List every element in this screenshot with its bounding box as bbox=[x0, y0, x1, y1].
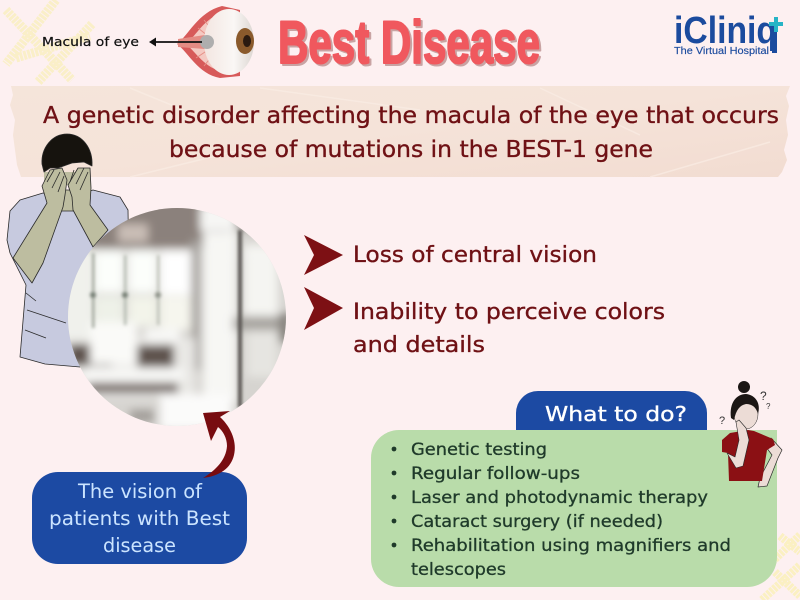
symptom: inability to perceive colors and details: Inability to perceive colors bbox=[353, 299, 665, 325]
panel: what to do list bbox=[371, 430, 777, 587]
title: Best Disease bbox=[280, 11, 542, 78]
symptom: inability to perceive colors and details: and details bbox=[353, 332, 485, 358]
symptom: loss of central vision: Loss of central vision bbox=[353, 242, 597, 268]
bullet icon: second chevron bbox=[304, 287, 343, 330]
illustration: thinking woman: ? bbox=[766, 402, 771, 411]
panel: what to do list: Genetic testing bbox=[411, 440, 547, 459]
panel: vision caption: patients with Best bbox=[49, 507, 230, 530]
label: macula of eye: Macula of eye bbox=[42, 34, 139, 49]
title bbox=[278, 9, 542, 78]
panel: what to do list: Cataract surgery (if needed) bbox=[411, 512, 663, 531]
panel: what to do list: telescopes bbox=[411, 560, 506, 579]
illustration: thinking woman: ? bbox=[760, 389, 767, 403]
arrow: macula pointer bbox=[149, 38, 202, 46]
illustration: thinking woman: ? bbox=[719, 415, 725, 427]
panel: what to do list: Laser and photodynamic therapy bbox=[411, 488, 708, 507]
symptom: inability to perceive colors and details bbox=[353, 299, 665, 358]
panel: vision caption: The vision of bbox=[77, 480, 203, 503]
illustration: man covering his eyes bbox=[7, 134, 130, 367]
arrow: caption to vision circle bbox=[203, 411, 235, 478]
panel: what to do list: Rehabilitation using magnifiers and bbox=[411, 536, 731, 555]
logo: iCliniq: The Virtual Hospital bbox=[674, 46, 769, 57]
illustration: thinking woman bbox=[719, 381, 782, 487]
definition text: because of mutations in the BEST-1 gene bbox=[169, 137, 653, 163]
decoration: yellow crosshatch top left bbox=[6, 0, 92, 82]
logo: iCliniq: iCliniq bbox=[674, 10, 777, 52]
definition text bbox=[43, 103, 779, 163]
decoration: yellow crosshatch bottom right bbox=[762, 535, 800, 600]
icon: eye anatomy bbox=[177, 6, 254, 78]
title: Best Disease bbox=[278, 9, 540, 76]
image: blurred vision circle bbox=[68, 208, 286, 426]
panel: definition paper strip bbox=[10, 86, 790, 177]
panel: vision caption bbox=[32, 472, 247, 564]
panel: what to do list: Regular follow-ups bbox=[411, 464, 580, 483]
definition text: A genetic disorder affecting the macula of the eye that occurs bbox=[43, 103, 779, 129]
tab: what to do bbox=[516, 391, 707, 430]
tab: what to do: What to do? bbox=[545, 402, 687, 426]
bullet icon: first chevron bbox=[304, 235, 343, 275]
panel: vision caption: disease bbox=[103, 534, 176, 557]
